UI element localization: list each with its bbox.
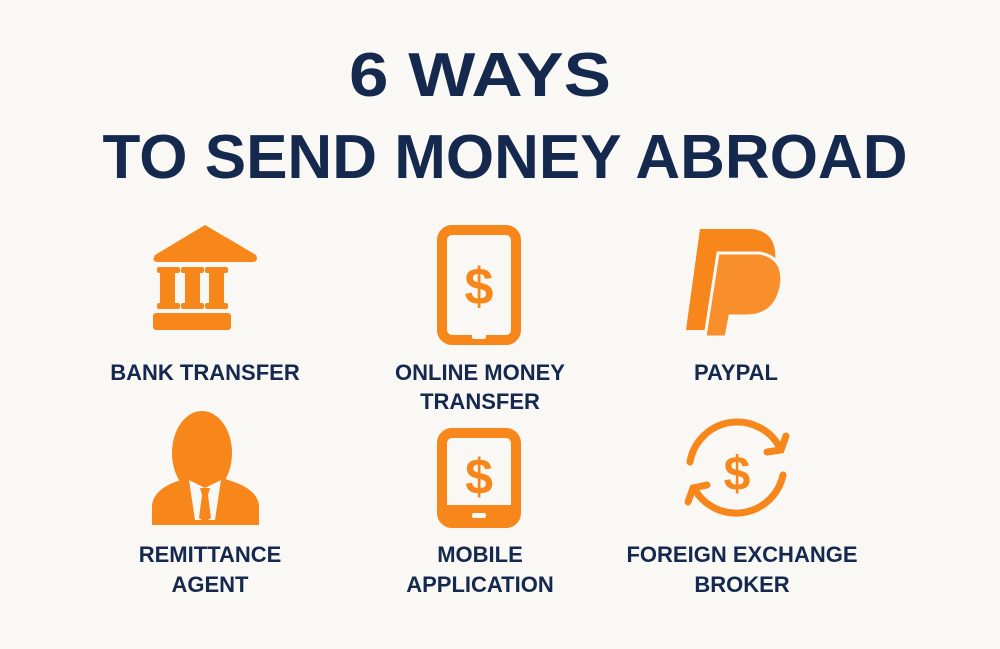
label: foreign exchange broker: BROKER [694, 572, 790, 597]
title: 6 WAYS [349, 41, 611, 110]
icon: paypal [686, 229, 782, 337]
label: remittance agent: REMITTANCE [139, 542, 281, 567]
icon: mobile application [442, 433, 516, 525]
icon: currency exchange: $ [724, 448, 751, 501]
icon: bank [153, 225, 257, 330]
label: foreign exchange broker: FOREIGN EXCHANGE [626, 542, 858, 567]
icon: currency exchange [688, 422, 786, 513]
label: bank transfer: BANK TRANSFER [110, 360, 300, 385]
title: TO SEND MONEY ABROAD [102, 123, 907, 192]
label: remittance agent: AGENT [172, 572, 249, 597]
label: paypal: PAYPAL [694, 360, 778, 385]
icon: online phone [442, 230, 516, 340]
label: online money transfer: TRANSFER [420, 389, 540, 414]
title [102, 41, 907, 192]
label: mobile application: APPLICATION [406, 572, 554, 597]
icon: remittance agent [152, 411, 259, 525]
label: mobile application: MOBILE [437, 542, 523, 567]
icon: mobile application: $ [465, 449, 493, 505]
label: online money transfer: ONLINE MONEY [395, 360, 565, 385]
icon: online phone: $ [465, 258, 494, 316]
